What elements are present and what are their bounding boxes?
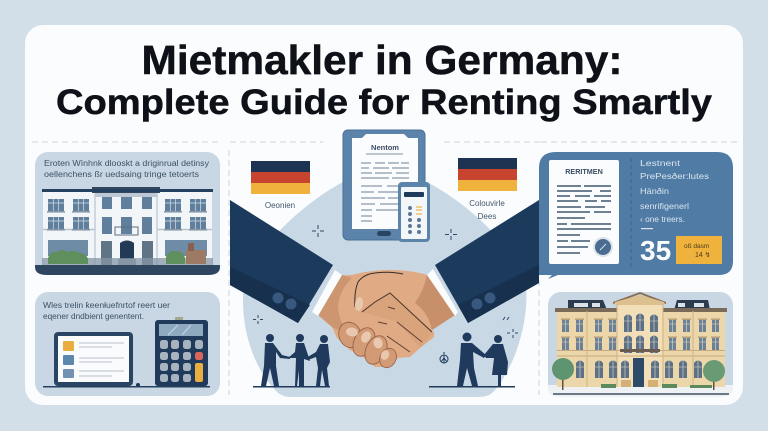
sparkles (253, 225, 518, 338)
right flag label: Colouvirle (469, 199, 505, 208)
panel caption: Wles trelin ƙeenłuefnrtof reert uer (43, 301, 170, 310)
title (56, 37, 713, 122)
panel: rental document and costs (539, 152, 733, 279)
white building (35, 187, 220, 275)
panel: laptop and calculator (35, 292, 220, 396)
panel caption: Eroten Wìnhnk dlooskt a driginrual detinsy (44, 159, 209, 168)
hands (318, 270, 455, 370)
left sleeve (230, 200, 333, 323)
trees (552, 358, 725, 390)
centre circle backdrop (243, 182, 526, 397)
icon: left German flag (251, 161, 310, 194)
icon: rental document: RERITMEN (565, 167, 603, 176)
callout: oß dasm (684, 243, 709, 250)
fingers (335, 319, 399, 370)
nails (345, 297, 391, 361)
panel text list: PrePesðer:lutes (640, 171, 709, 181)
icon: tablet with contract (343, 130, 425, 240)
callout: 14 ↯ (695, 251, 711, 259)
handshake (230, 200, 539, 370)
icon: tablet with contract: Nentom (371, 143, 399, 152)
right flag label (469, 199, 505, 221)
title: Mietmakler in Germany: (142, 37, 622, 83)
right flag label: Dees (478, 212, 496, 221)
silhouettes: three people shaking hands (261, 334, 330, 386)
dormers (568, 300, 710, 310)
icon: right German flag (458, 158, 517, 191)
panel caption (44, 159, 209, 179)
icon: calculator (155, 317, 208, 386)
ground line left (253, 386, 330, 388)
panel: classic rental building (548, 292, 733, 397)
panel text list: senrifigenerl (640, 201, 689, 211)
icon: small emblem (440, 352, 448, 363)
panel text list: ‹ one treers. (640, 214, 685, 224)
icon: rental document (549, 160, 619, 264)
ornate building (555, 292, 727, 387)
figure 35: 35 (640, 235, 671, 266)
panel text list (640, 158, 709, 224)
shirt cuffs (312, 269, 458, 316)
icon: phone calculator (398, 182, 430, 242)
panel caption: oellenchens ßr uedsaing tringe tetoerts (44, 170, 199, 179)
panel: apartment building with caption (35, 152, 220, 275)
right sleeve (435, 200, 539, 323)
left flag label: Oeonien (265, 201, 295, 210)
title: Complete Guide for Renting Smartly (56, 83, 713, 122)
panel caption (43, 301, 170, 321)
panel text list: Hänðin (640, 186, 669, 196)
ground line right (429, 386, 515, 388)
callout (676, 236, 722, 264)
icon: laptop (54, 332, 140, 387)
panel caption: eɋener dndbient genentent. (43, 312, 144, 321)
panel text list: Lestnent (640, 158, 681, 168)
silhouettes: two people shaking hands (457, 332, 508, 386)
